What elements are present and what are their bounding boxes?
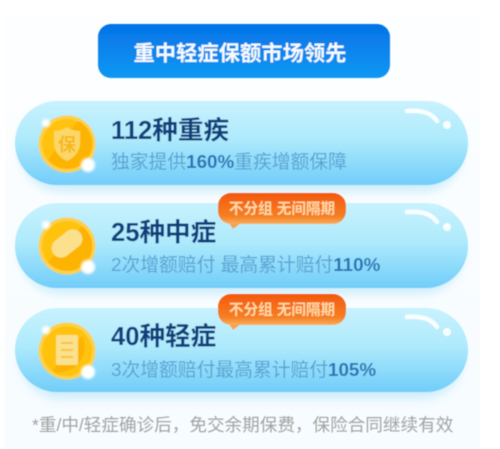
title banner (98, 24, 390, 78)
icon: shield coin: 保 (58, 135, 76, 155)
title banner: 重中轻症保额市场领先 (134, 40, 346, 66)
badge: no grouping, no waiting period: 不分组 无间隔期 (229, 200, 335, 218)
badge: no grouping, no waiting period: 不分组 无间隔期 (229, 302, 335, 318)
panel: 25 moderate illnesses (15, 193, 468, 294)
heading: 25种中症 (111, 218, 216, 247)
description: 独家提供160%重疾增额保障 (111, 151, 347, 172)
panel: 40 mild illnesses (15, 294, 468, 399)
gloss highlight (407, 111, 451, 129)
footnote: *重/中/轻症确诊后，免交余期保费，保险合同继续有效 (32, 415, 453, 435)
description: 2次增额赔付 最高累计赔付110% (111, 254, 381, 275)
heading: 40种轻症 (111, 322, 216, 351)
icon: document coin (38, 322, 96, 380)
description: 3次增额赔付最高累计赔付105% (111, 359, 376, 380)
panel: 112 critical illnesses (15, 101, 468, 192)
gloss highlight (407, 212, 451, 231)
icon: capsule coin (38, 218, 96, 274)
gloss highlight (407, 317, 451, 336)
badge: no grouping, no waiting period (218, 193, 346, 229)
badge: no grouping, no waiting period (218, 294, 346, 330)
icon: shield coin (38, 116, 96, 172)
heading: 112种重疾 (111, 116, 229, 145)
